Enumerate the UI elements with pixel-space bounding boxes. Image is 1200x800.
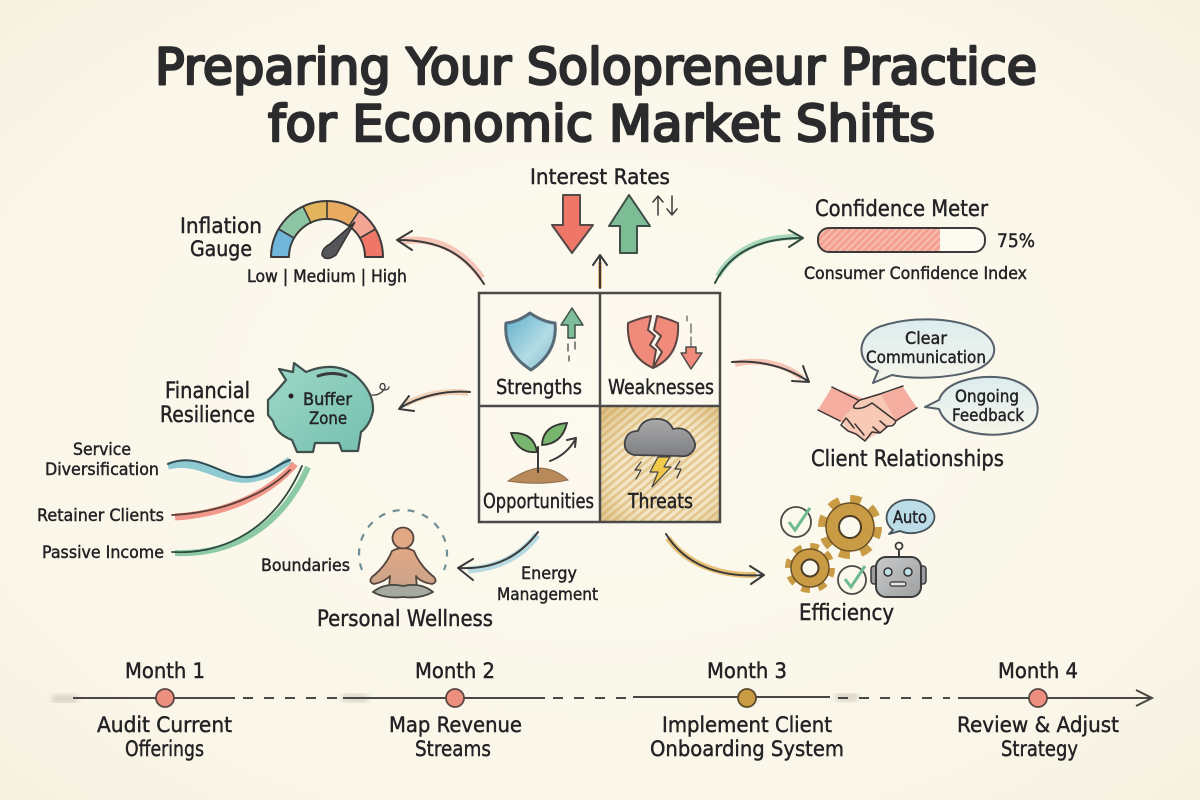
speech bubble: auto: [887, 500, 934, 534]
caption: Consumer Confidence Index: [804, 264, 1027, 284]
month 1: Offerings: [125, 737, 204, 761]
arrow: to confidence meter: [715, 230, 803, 283]
income stream: service diversification: Diversification: [45, 460, 159, 480]
icon: green up arrow: [609, 195, 650, 253]
heading: financial resilience: [160, 378, 255, 428]
arrow: to client relationships: [732, 362, 809, 382]
quadrant: strengths: [496, 308, 583, 399]
income stream: retainer clients: Retainer Clients: [37, 506, 164, 526]
panel: financial resilience: [37, 363, 389, 563]
panel: interest rates: [530, 165, 677, 253]
heading: interest rates: Interest Rates: [530, 165, 670, 189]
month 2: Month 2: [415, 659, 495, 683]
month 3: [650, 659, 844, 761]
icon: small gear: [789, 547, 831, 589]
icon: handshake: [818, 386, 917, 441]
timeline: [52, 659, 1152, 761]
speech bubble: auto: Auto: [893, 508, 927, 528]
income stream: service diversification: [45, 440, 290, 480]
month 1: Audit Current: [97, 713, 232, 737]
icon: robot: [871, 542, 926, 597]
panel: confidence meter: [804, 196, 1035, 284]
icon: small up down arrows: [653, 196, 677, 215]
label: energy management: Management: [497, 585, 598, 605]
month 3: Month 3: [707, 659, 787, 683]
income stream: passive income: [42, 466, 308, 563]
income stream: service diversification: Service: [73, 440, 131, 460]
arrow: to financial resilience: [399, 392, 470, 411]
month 2: [389, 659, 522, 761]
quadrant: strengths: Strengths: [496, 375, 582, 399]
icon: check one: [781, 507, 811, 537]
quadrant: opportunities: Opportunities: [483, 489, 594, 513]
heading: inflation gauge: Gauge: [190, 237, 252, 261]
month 4: Month 4: [998, 659, 1078, 683]
month 3: Onboarding System: [650, 737, 844, 761]
piggy label: Buffer: [303, 390, 352, 410]
panel: client relationships: [811, 319, 1038, 472]
icon: piggy bank: [268, 363, 389, 452]
arrow: to inflation gauge: [397, 231, 484, 284]
panel: SWOT matrix: [479, 293, 720, 522]
panel: inflation gauge: [180, 201, 407, 287]
quadrant: weaknesses: [608, 316, 714, 399]
quadrant: opportunities: [483, 423, 594, 513]
icon: red down arrow: [552, 195, 593, 253]
heading: financial resilience: Resilience: [160, 402, 255, 428]
speech bubble: ongoing feedback: Feedback: [952, 406, 1024, 426]
month 4: Strategy: [1001, 737, 1078, 761]
income stream: passive income: Passive Income: [42, 543, 164, 563]
title: for Economic Market Shifts: [268, 95, 935, 153]
piggy label: Zone: [309, 409, 347, 429]
timeline line: [52, 690, 1152, 706]
arrow: to interest rates: [593, 255, 607, 288]
quadrant: threats: [625, 419, 695, 513]
month 1: [97, 659, 232, 761]
speech bubble: clear communication: [861, 319, 994, 383]
icon: gauge dial: [271, 201, 383, 258]
quadrant: threats: Threats: [627, 489, 693, 513]
speech bubble: ongoing feedback: Ongoing: [955, 387, 1019, 407]
threats shading: [600, 406, 720, 522]
icon: meditating figure: [370, 528, 436, 597]
title: [155, 38, 1037, 153]
month 4: Review & Adjust: [957, 713, 1119, 737]
value: 75%: [997, 230, 1035, 252]
arrow: to efficiency: [666, 534, 764, 584]
speech bubble: clear communication: Clear: [905, 329, 947, 349]
month 1: Month 1: [125, 659, 205, 683]
month 2: Map Revenue: [389, 713, 522, 737]
matrix grid: [479, 293, 720, 522]
label: energy management: Energy: [521, 564, 577, 584]
panel: efficiency: [781, 500, 934, 626]
heading: inflation gauge: Inflation: [180, 214, 262, 238]
month 2: Streams: [415, 737, 491, 761]
icon: check two: [838, 566, 866, 594]
label: energy management: [497, 564, 598, 605]
heading: confidence meter: Confidence Meter: [815, 196, 989, 222]
icon: big gear: [823, 500, 877, 554]
speech bubble: clear communication: Communication: [866, 348, 986, 368]
month 4: [957, 659, 1119, 761]
heading: inflation gauge: [180, 214, 262, 261]
heading: efficiency: Efficiency: [799, 600, 894, 626]
heading: financial resilience: Financial: [165, 378, 250, 404]
label: boundaries: Boundaries: [261, 556, 350, 576]
piggy label: [303, 390, 352, 429]
panel: personal wellness: [261, 510, 598, 632]
title: Preparing Your Solopreneur Practice: [155, 38, 1037, 96]
arrow: to personal wellness: [458, 532, 538, 580]
speech bubble: ongoing feedback: [925, 377, 1038, 435]
income stream: retainer clients: [37, 464, 295, 526]
month 3: Implement Client: [662, 713, 832, 737]
heading: personal wellness: Personal Wellness: [317, 606, 493, 632]
heading: client relationships: Client Relationships: [811, 446, 1004, 472]
scale labels: Low | Medium | High: [247, 267, 407, 287]
quadrant: weaknesses: Weaknesses: [608, 375, 714, 399]
boundary ring: [359, 510, 447, 570]
progress bar: [818, 228, 985, 252]
